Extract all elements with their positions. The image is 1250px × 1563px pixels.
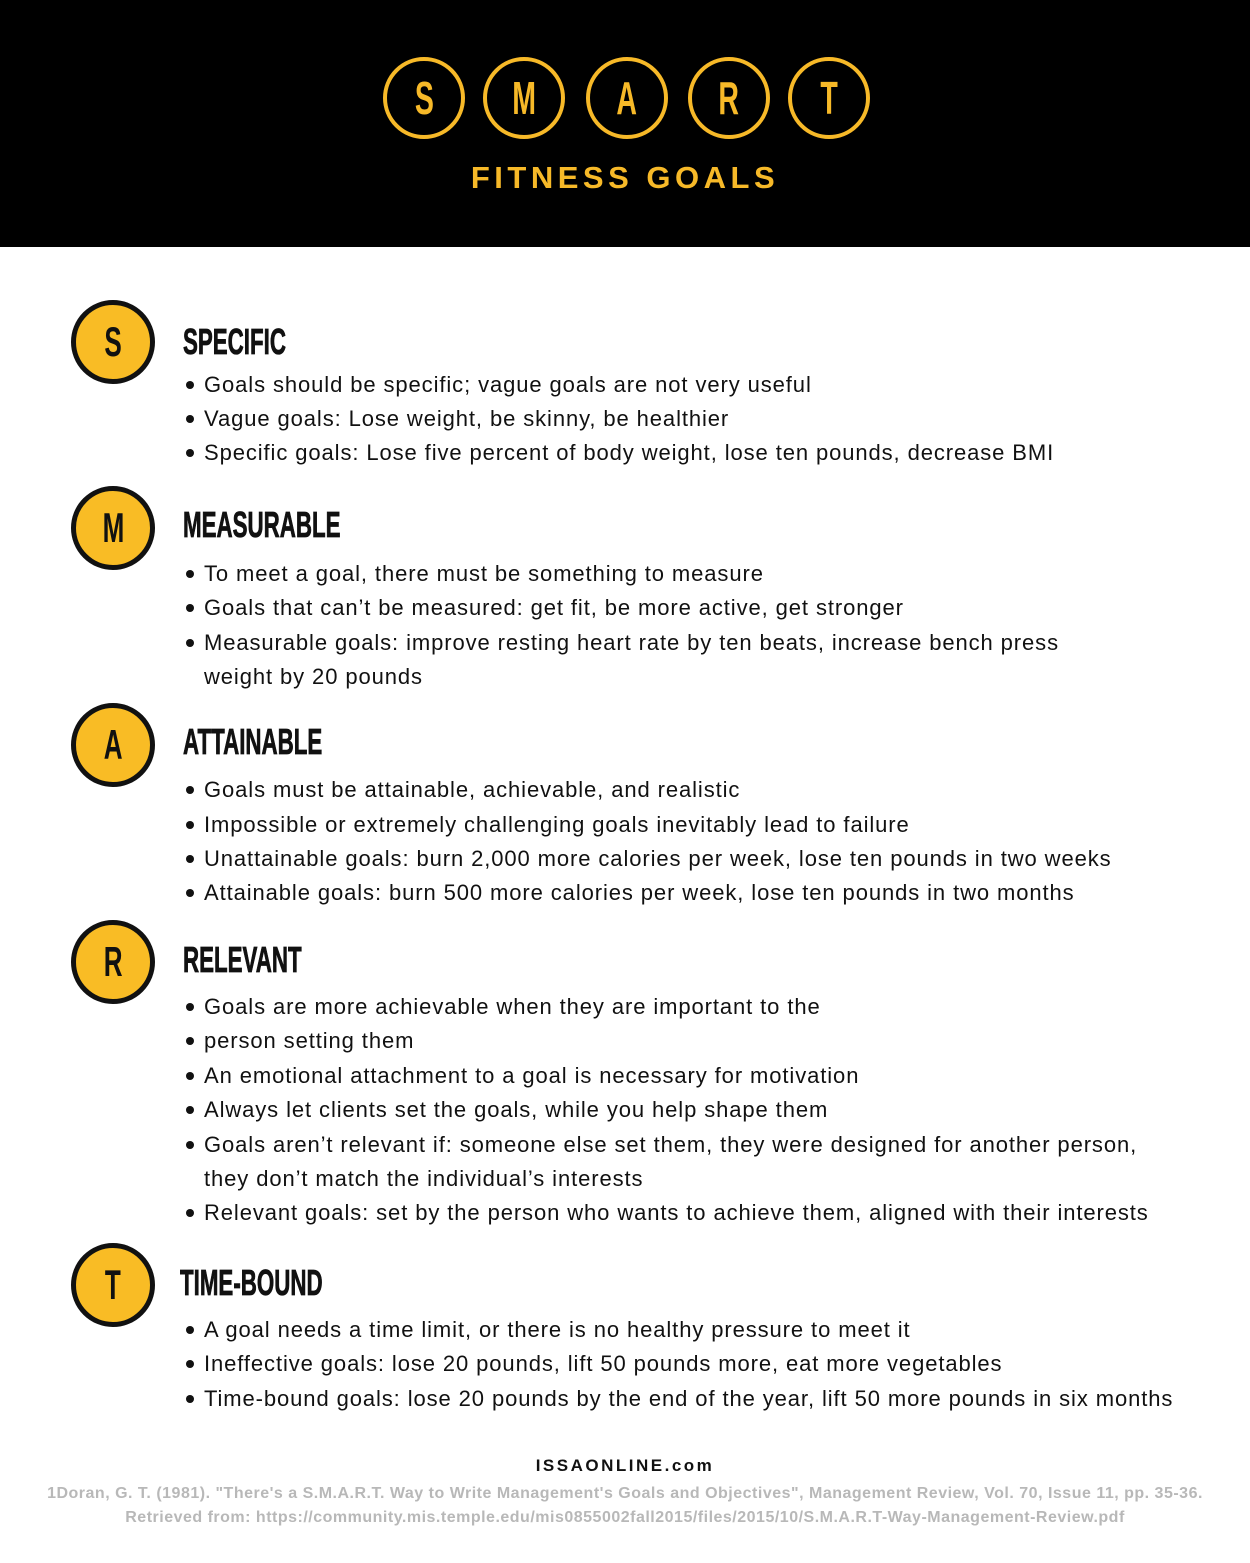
header circle A: A	[617, 72, 637, 124]
header circle M	[483, 57, 565, 139]
text: Ineffective goals: lose 20 pounds, lift 50 pounds more, eat more vegetables	[204, 1351, 1002, 1376]
header circle R	[688, 57, 770, 139]
icon: T: T	[105, 1261, 121, 1308]
icon: R	[71, 920, 155, 1004]
text: To meet a goal, there must be something to measure	[204, 561, 764, 586]
text: Goals aren’t relevant if: someone else set them, they were designed for another person,	[204, 1132, 1137, 1157]
site: ISSAONLINE.com	[536, 1456, 714, 1475]
text: Relevant goals: set by the person who wants to achieve them, aligned with their interests	[204, 1200, 1149, 1225]
header circle S	[383, 57, 465, 139]
text: Goals should be specific; vague goals are not very useful	[204, 372, 812, 397]
text: Goals that can’t be measured: get fit, be more active, get stronger	[204, 595, 904, 620]
header circle A	[586, 57, 668, 139]
bullets: attainable	[186, 777, 1112, 905]
header circle M: M	[512, 72, 536, 124]
heading: measurable: MEASURABLE	[183, 504, 340, 545]
heading: specific: SPECIFIC	[183, 321, 286, 362]
header circle S: S	[414, 72, 434, 124]
text: Measurable goals: improve resting heart rate by ten beats, increase bench press	[204, 630, 1059, 655]
citation: Retrieved from: https://community.mis.temple.edu/mis0855002fall2015/files/2015/10/S.M.A.R.T-Way-Management-Review.pdf	[125, 1509, 1125, 1526]
footer	[47, 1456, 1203, 1526]
text: Unattainable goals: burn 2,000 more calories per week, lose ten pounds in two weeks	[204, 846, 1112, 871]
text: Time-bound goals: lose 20 pounds by the end of the year, lift 50 more pounds in six months	[204, 1386, 1173, 1411]
icon: R: R	[104, 938, 122, 985]
header circle T	[788, 57, 870, 139]
text: Goals are more achievable when they are important to the	[204, 994, 821, 1019]
text: Impossible or extremely challenging goals inevitably lead to failure	[204, 812, 910, 837]
icon: S: S	[104, 318, 122, 365]
subtitle: FITNESS GOALS	[471, 160, 779, 195]
text: Vague goals: Lose weight, be skinny, be healthier	[204, 406, 729, 431]
bullets: time-bound	[186, 1317, 1173, 1411]
text: person setting them	[204, 1028, 414, 1053]
text: weight by 20 pounds	[204, 664, 423, 689]
text: A goal needs a time limit, or there is no healthy pressure to meet it	[204, 1317, 911, 1342]
text: Always let clients set the goals, while you help shape them	[204, 1097, 828, 1122]
text: Goals must be attainable, achievable, and realistic	[204, 777, 740, 802]
bullets: measurable	[186, 561, 1059, 689]
icon: S	[71, 300, 155, 384]
icon: M: M	[102, 504, 124, 551]
icon: A	[71, 703, 155, 787]
header circle R: R	[719, 72, 739, 124]
header	[0, 0, 1250, 247]
icon: M	[71, 486, 155, 570]
text: Attainable goals: burn 500 more calories per week, lose ten pounds in two months	[204, 880, 1075, 905]
icon: T	[71, 1243, 155, 1327]
header circle T: T	[820, 72, 838, 124]
text: An emotional attachment to a goal is necessary for motivation	[204, 1063, 859, 1088]
heading: relevant: RELEVANT	[183, 939, 302, 980]
heading: time-bound: TIME-BOUND	[180, 1262, 323, 1303]
citation: 1Doran, G. T. (1981). "There's a S.M.A.R.T. Way to Write Management's Goals and Objectives", Management Review, Vol. 70, Issue 11, pp. 35-36.	[47, 1485, 1203, 1502]
text: they don’t match the individual’s interests	[204, 1166, 643, 1191]
bullets: specific	[186, 372, 1054, 465]
text: Specific goals: Lose five percent of body weight, lose ten pounds, decrease BMI	[204, 440, 1054, 465]
icon: A: A	[104, 721, 122, 768]
bullets: relevant	[186, 994, 1149, 1225]
heading: attainable: ATTAINABLE	[183, 721, 322, 762]
citation	[47, 1485, 1203, 1526]
